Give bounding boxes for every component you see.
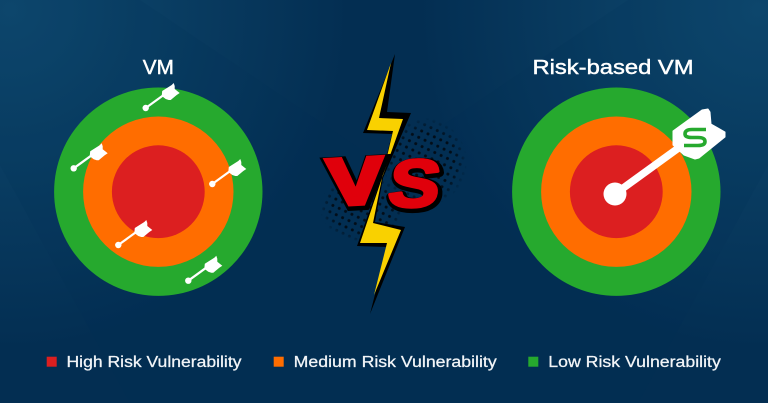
dart: centre [115, 220, 152, 248]
large dart [604, 109, 725, 206]
icon: S logo [684, 130, 706, 146]
VS lettering [326, 143, 448, 223]
dart: right [209, 159, 246, 187]
dart: top [142, 83, 180, 111]
title: VM: VM [143, 56, 174, 79]
letter S: S [385, 149, 447, 223]
letter V: V [326, 143, 385, 219]
dart: left [70, 143, 108, 172]
legend: high risk: High Risk Vulnerability [66, 354, 242, 371]
lightning bolt [357, 54, 411, 314]
target: Risk-based VM [512, 88, 725, 296]
legend: medium risk: Medium Risk Vulnerability [294, 354, 497, 371]
legend [47, 354, 721, 371]
letter V: V [327, 145, 386, 221]
letter S: S [384, 147, 446, 221]
dart: bottom [185, 256, 222, 284]
target: VM [54, 83, 262, 296]
legend: low risk: Low Risk Vulnerability [548, 354, 721, 371]
halftone dots [322, 120, 464, 240]
title: Risk-based VM: Risk-based VM [532, 56, 694, 79]
